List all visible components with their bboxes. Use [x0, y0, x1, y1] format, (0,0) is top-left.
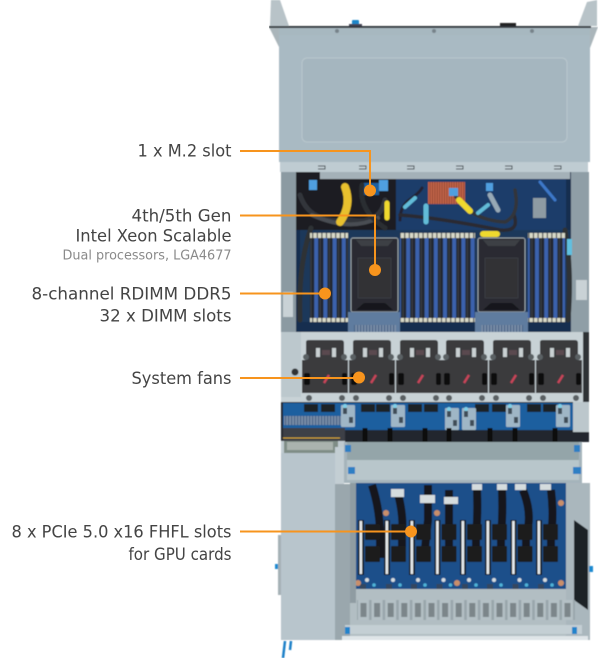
DIMM slots: right group — [528, 233, 565, 322]
M.2 area connector — [361, 183, 379, 195]
board edge connectors — [348, 312, 528, 332]
DIMM slots: centre group — [400, 233, 475, 322]
rear pull tab — [283, 641, 291, 658]
callout: PCIe slots: for GPU cards — [128, 545, 232, 564]
PCIe board — [350, 483, 566, 592]
callout: DIMM slots: 8-channel RDIMM DDR5 — [32, 284, 232, 304]
DIMM slots: left group — [310, 233, 348, 322]
callout: DIMM slots: 32 x DIMM slots — [100, 306, 232, 326]
riser connector bay — [281, 441, 345, 453]
callout: processors — [62, 206, 381, 276]
cable bundles — [300, 182, 569, 320]
callout: system fans: System fans — [132, 369, 232, 388]
system fan tray — [281, 332, 589, 402]
callout: system fans — [132, 369, 365, 388]
callout: processors: 4th/5th Gen — [132, 206, 232, 226]
callout: M.2 slot: 1 x M.2 slot — [138, 142, 232, 160]
fan board — [281, 402, 589, 442]
motherboard compartment — [281, 172, 589, 332]
cables to PCIe slots — [372, 485, 552, 558]
side storage block — [275, 453, 350, 640]
callout: processors: Dual processors, LGA4677 — [62, 248, 232, 264]
chassis: server top view — [269, 0, 598, 658]
mounting ears — [269, 0, 598, 49]
callout: processors: Intel Xeon Scalable — [76, 226, 232, 246]
callout: M.2 slot — [138, 142, 376, 196]
CPU socket 1 — [351, 238, 398, 312]
callout: PCIe slots: 8 x PCIe 5.0 x16 FHFL slots — [12, 522, 232, 542]
copper heatsink — [428, 182, 465, 204]
CPU socket 2 — [478, 238, 525, 312]
PCIe slots — [358, 520, 558, 592]
front handle and latch — [349, 20, 516, 27]
callout: PCIe slots — [12, 522, 417, 564]
rear bay — [342, 483, 593, 640]
GPU card bracket — [335, 442, 582, 484]
top cover — [269, 26, 591, 172]
callout: DIMM slots — [32, 284, 331, 326]
